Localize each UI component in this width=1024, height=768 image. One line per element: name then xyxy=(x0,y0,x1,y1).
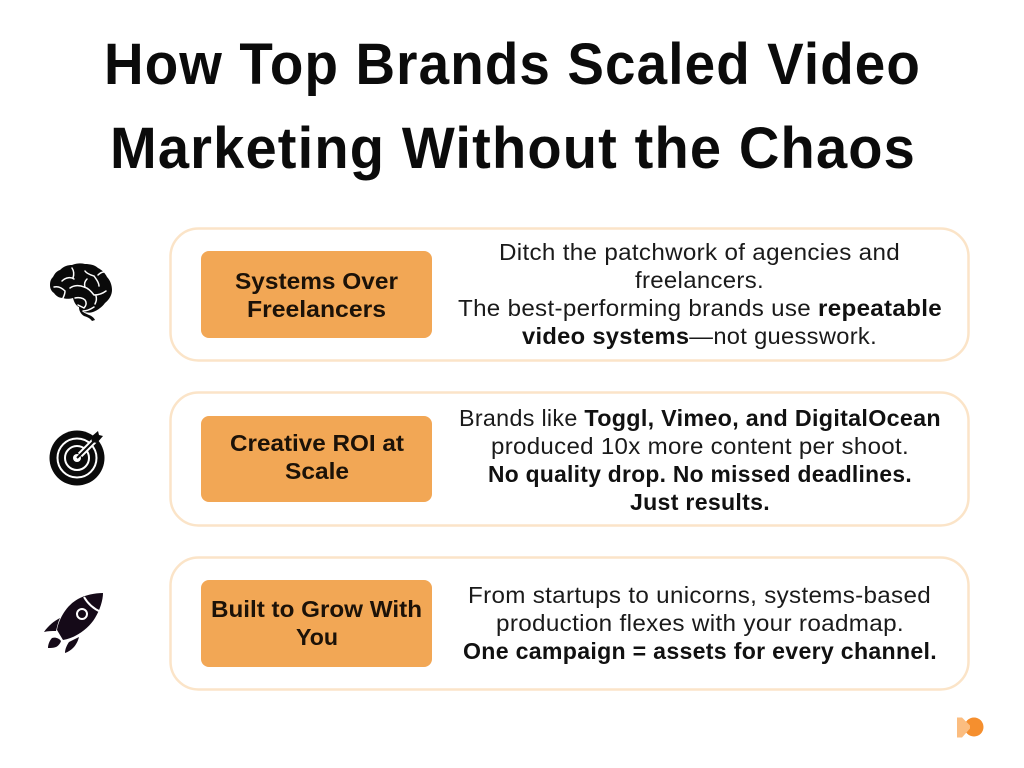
label: systems over freelancers: Systems Over xyxy=(235,268,398,294)
label: systems over freelancers xyxy=(201,251,432,338)
text: systems over freelancers description: The best-performing brands use repeatable xyxy=(458,295,942,321)
panel: creative ROI at scale xyxy=(170,392,968,526)
label: systems over freelancers: Freelancers xyxy=(247,296,386,322)
panel: systems over freelancers xyxy=(170,228,968,360)
text: creative ROI description: Just results. xyxy=(630,489,770,515)
text: built to grow description: One campaign = assets for every channel. xyxy=(463,638,937,664)
panel: built to grow with you xyxy=(170,558,968,690)
logo mark xyxy=(957,718,984,738)
icon: brain xyxy=(50,263,112,321)
text: creative ROI description xyxy=(459,405,941,515)
icon: rocket xyxy=(44,593,103,653)
label: built to grow with you: You xyxy=(296,624,338,650)
text: systems over freelancers description xyxy=(458,239,942,349)
text: creative ROI description: Brands like Toggl, Vimeo, and DigitalOcean xyxy=(459,405,941,431)
text: creative ROI description: produced 10x more content per shoot. xyxy=(491,433,909,459)
text: systems over freelancers description: freelancers. xyxy=(635,267,764,293)
icon: target xyxy=(50,430,104,486)
label: creative ROI at scale: Scale xyxy=(285,458,349,484)
title: Marketing Without the Chaos xyxy=(110,116,916,181)
title: How Top Brands Scaled Video xyxy=(104,32,921,97)
text: built to grow description xyxy=(463,582,937,664)
label: built to grow with you: Built to Grow With xyxy=(211,596,422,622)
label: built to grow with you xyxy=(201,580,432,667)
title xyxy=(104,32,921,181)
text: creative ROI description: No quality drop. No missed deadlines. xyxy=(488,461,912,487)
text: systems over freelancers description: video systems—not guesswork. xyxy=(522,323,877,349)
text: systems over freelancers description: Ditch the patchwork of agencies and xyxy=(499,239,900,265)
text: built to grow description: From startups to unicorns, systems-based xyxy=(468,582,931,608)
text: built to grow description: production flexes with your roadmap. xyxy=(496,610,904,636)
label: creative ROI at scale xyxy=(201,416,432,502)
label: creative ROI at scale: Creative ROI at xyxy=(230,430,404,456)
